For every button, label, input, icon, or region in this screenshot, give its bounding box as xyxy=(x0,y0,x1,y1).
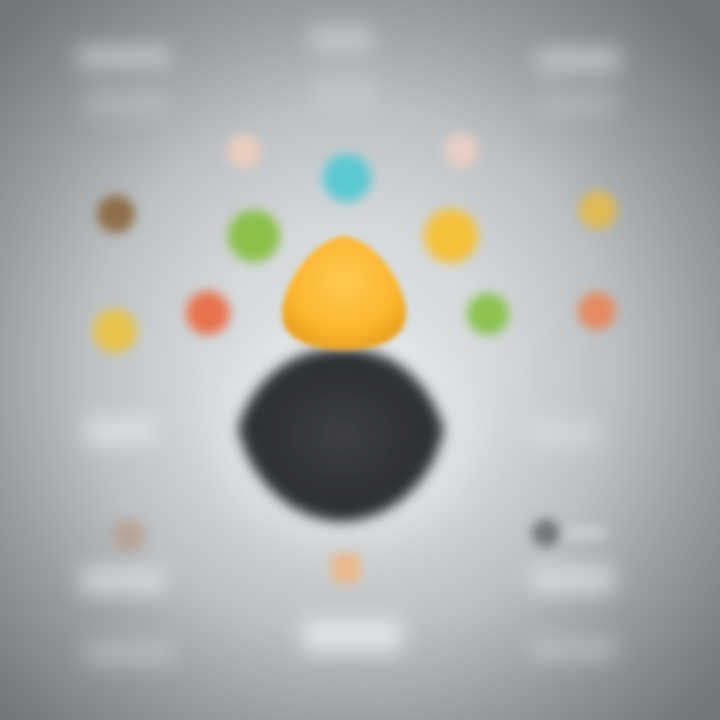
icon: green circle left xyxy=(228,210,280,262)
panel: lower right blurred text block xyxy=(530,420,616,662)
icon: large dark blob xyxy=(238,348,444,522)
icon: small peach square bottom centre xyxy=(331,553,361,583)
icon: brown circle xyxy=(97,195,135,233)
icon: green circle right xyxy=(467,293,509,335)
icon: yellow circle far left xyxy=(93,309,137,353)
icon: gold circle far right xyxy=(579,191,617,229)
panel: bottom centre blurred text block xyxy=(302,618,402,652)
icon: pale pink circle right xyxy=(444,133,478,167)
panel: top left blurred text block xyxy=(78,46,170,116)
icon: small brown circle lower left xyxy=(113,519,145,551)
central soft glow xyxy=(215,315,475,545)
icon: yellow circle right xyxy=(424,209,478,263)
icon: pale pink circle left xyxy=(227,134,261,168)
icon: orange circle far right xyxy=(578,292,616,330)
icon: orange red circle xyxy=(186,291,230,335)
panel: top centre blurred text block xyxy=(310,26,376,112)
icon: dark grey mark lower right xyxy=(532,519,606,547)
icon: large yellow drop xyxy=(282,236,406,350)
panel: top right blurred text block xyxy=(536,48,620,116)
icon: cyan circle xyxy=(323,154,371,202)
panel: lower left blurred text block xyxy=(80,416,174,666)
